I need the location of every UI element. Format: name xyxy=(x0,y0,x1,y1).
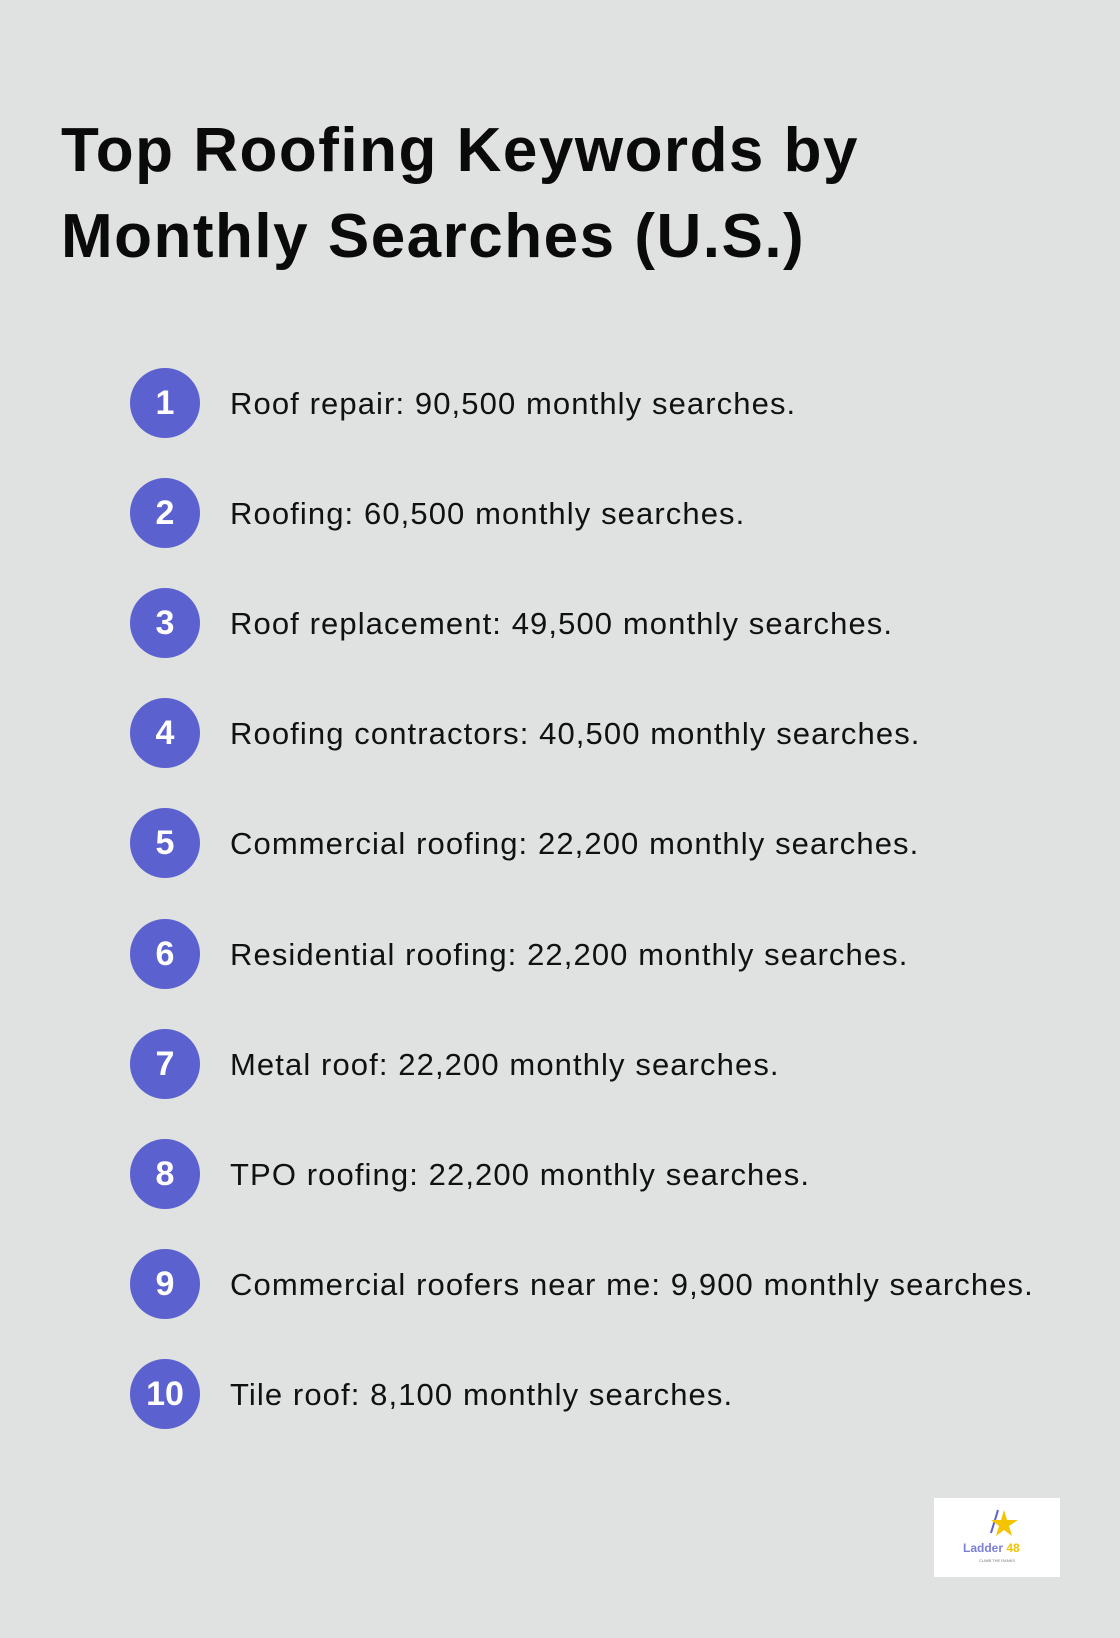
list item 1: Roof repair: 90,500 monthly searches. xyxy=(230,386,796,421)
logo: CLIMB THE RANKS xyxy=(979,1558,1015,1563)
list item 3: Roof replacement: 49,500 monthly searches. xyxy=(230,606,893,641)
list item 8: TPO roofing: 22,200 monthly searches. xyxy=(230,1157,810,1192)
list item 3 xyxy=(130,588,893,658)
title: Top Roofing Keywords by xyxy=(61,116,859,185)
title: Monthly Searches (U.S.) xyxy=(61,202,805,271)
list item 9 xyxy=(130,1249,1034,1319)
logo: Ladder 48 xyxy=(963,1541,1020,1555)
list item 9: 9 xyxy=(156,1265,174,1303)
list item 6: Residential roofing: 22,200 monthly searches. xyxy=(230,937,908,972)
list item 10 xyxy=(130,1359,733,1429)
list item 1: 1 xyxy=(156,384,174,422)
list item 7: 7 xyxy=(156,1045,174,1083)
list item 5: Commercial roofing: 22,200 monthly searches. xyxy=(230,826,919,861)
list item 3: 3 xyxy=(156,604,174,642)
list item 2 xyxy=(130,478,745,548)
list item 2: 2 xyxy=(156,494,174,532)
list item 8: 8 xyxy=(156,1155,174,1193)
list item 10: 10 xyxy=(146,1375,184,1413)
list item 4: Roofing contractors: 40,500 monthly searches. xyxy=(230,716,921,751)
list item 9: Commercial roofers near me: 9,900 monthly searches. xyxy=(230,1267,1034,1302)
list item 10: Tile roof: 8,100 monthly searches. xyxy=(230,1377,733,1412)
list item 5 xyxy=(130,808,919,878)
list item 4 xyxy=(130,698,921,768)
list item 6 xyxy=(130,919,908,989)
title xyxy=(61,116,859,271)
list item 5: 5 xyxy=(156,824,174,862)
list item 6: 6 xyxy=(156,935,174,973)
list item 2: Roofing: 60,500 monthly searches. xyxy=(230,496,745,531)
list item 7 xyxy=(130,1029,780,1099)
list item 1 xyxy=(130,368,796,438)
list item 4: 4 xyxy=(156,714,174,752)
list item 7: Metal roof: 22,200 monthly searches. xyxy=(230,1047,780,1082)
list item 8 xyxy=(130,1139,810,1209)
logo xyxy=(934,1498,1060,1577)
